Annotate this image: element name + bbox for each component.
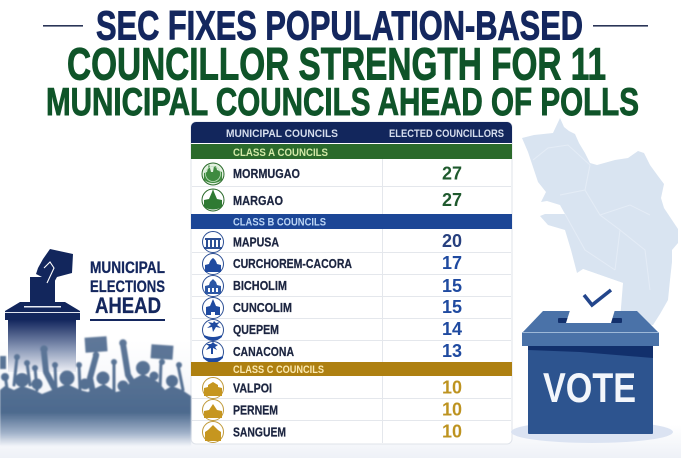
text: municipal elections ahead: MUNICIPAL [90,259,165,277]
row: Pernem [202,400,462,420]
row: Bicholim [202,276,462,296]
icon: ballot box with hand [5,249,80,372]
table header [191,122,512,143]
row: Pernem: 10 [442,400,462,420]
row: Margao: MARGAO [233,194,283,208]
row: Bicholim: 15 [442,276,462,296]
class B band: CLASS B COUNCILS [233,216,326,228]
text: municipal elections ahead: ELECTIONS [90,278,165,296]
row: Margao: 27 [442,190,462,210]
class C band: CLASS C COUNCILS [233,364,324,376]
title [43,2,648,124]
class C band [191,362,512,376]
row: Canacona: 13 [442,341,462,361]
row: Curchorem-Cacora: CURCHOREM-CACORA [233,257,352,271]
class A band [191,144,512,159]
map of Goa [522,118,678,325]
vote label: VOTE [543,364,636,411]
row: Pernem: PERNEM [233,404,278,418]
panel: councillor table [191,122,512,444]
row: Cuncolim: CUNCOLIM [233,301,292,315]
row: Margao [202,189,462,211]
class B band [191,214,512,229]
row: Mapusa: 20 [442,231,462,251]
text: municipal elections ahead [90,259,165,321]
row: Mormugao: MORMUGAO [233,167,300,181]
row: Mormugao [202,163,462,185]
row: Valpoi: 10 [442,378,462,398]
text: municipal elections ahead: AHEAD [95,293,161,318]
row: Curchorem-Cacora [202,253,462,274]
row: Canacona [202,341,462,362]
row: Bicholim: BICHOLIM [233,279,287,293]
crowd with placards [0,336,191,446]
row: Cuncolim: 15 [442,297,462,317]
row: Quepem: QUEPEM [233,323,279,337]
row: Curchorem-Cacora: 17 [442,253,462,273]
row: Quepem: 14 [442,319,462,339]
row: Sanguem [202,422,462,442]
row: Mapusa [202,231,462,252]
row: Canacona: CANACONA [233,345,294,359]
ballot paper [566,269,623,323]
table header: ELECTED COUNCILLORS [389,128,504,140]
row: Valpoi: VALPOI [233,382,272,396]
row: Cuncolim [202,297,462,318]
row: Sanguem: SANGUEM [233,426,286,440]
row: Mapusa: MAPUSA [233,236,279,250]
row: Valpoi [202,378,462,398]
table header: MUNICIPAL COUNCILS [226,128,338,140]
icon: vote box [511,269,673,443]
row: Mormugao: 27 [442,164,462,184]
class A band: CLASS A COUNCILS [233,147,328,159]
row: Quepem [202,319,462,340]
row: Sanguem: 10 [442,422,462,442]
